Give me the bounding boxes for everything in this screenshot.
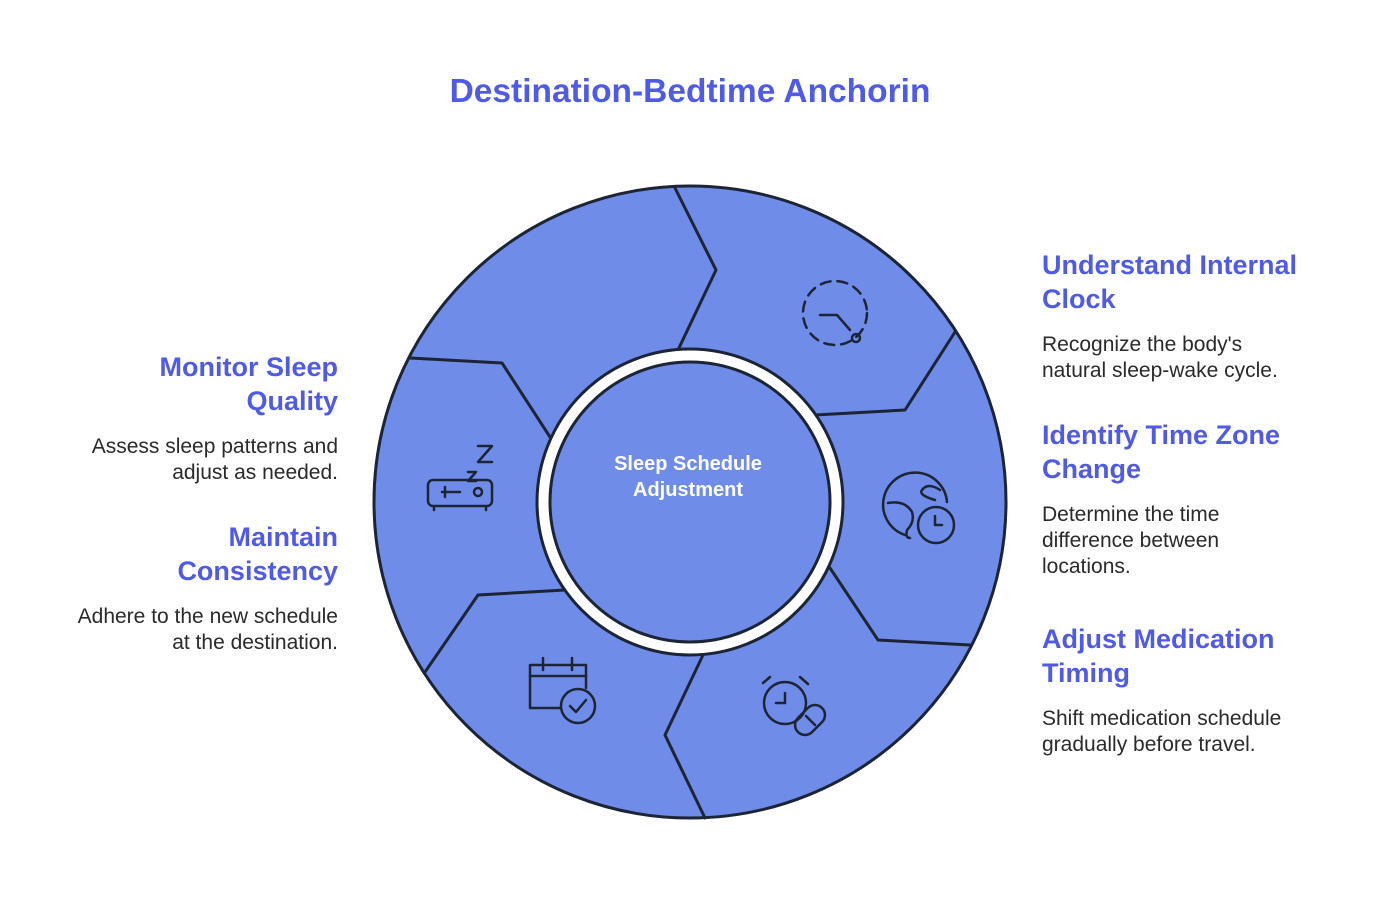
text: adjust medication timing: gradually before travel. [1042, 733, 1256, 756]
text: understand internal clock: Understand Internal [1042, 250, 1297, 280]
text: maintain consistency: at the destination. [172, 631, 338, 654]
icon: dashed clock [803, 281, 867, 345]
text: identify time zone change [1042, 420, 1280, 578]
center label: Sleep Schedule [614, 453, 762, 475]
text: adjust medication timing: Adjust Medication [1042, 624, 1275, 654]
icon: globe clock [883, 473, 954, 543]
text: understand internal clock: Clock [1042, 284, 1116, 314]
text: adjust medication timing: Shift medication schedule [1042, 707, 1281, 730]
text: maintain consistency: Consistency [177, 556, 338, 586]
text: adjust medication timing [1042, 624, 1281, 756]
icon: alarm pill [763, 677, 829, 739]
text: identify time zone change: locations. [1042, 555, 1131, 578]
text: identify time zone change: Identify Time Zone [1042, 420, 1280, 450]
icon: sleep device [428, 446, 492, 510]
text: understand internal clock [1042, 250, 1297, 382]
text: monitor sleep quality: Quality [246, 386, 338, 416]
outer ring [374, 186, 1006, 818]
segment dividers [410, 188, 970, 818]
text: monitor sleep quality: Assess sleep patterns and [92, 435, 338, 458]
title: Destination-Bedtime Anchorin [450, 73, 930, 110]
text: adjust medication timing: Timing [1042, 658, 1130, 688]
cycle diagram: Adjustment [633, 479, 743, 501]
text: understand internal clock: natural sleep-wake cycle. [1042, 359, 1278, 382]
text: monitor sleep quality: Monitor Sleep [159, 352, 338, 382]
text: understand internal clock: Recognize the body's [1042, 333, 1242, 356]
text: monitor sleep quality: adjust as needed. [172, 461, 338, 484]
text: identify time zone change: difference between [1042, 529, 1219, 552]
text: maintain consistency: Adhere to the new schedule [78, 605, 338, 628]
icon: calendar check [530, 658, 595, 723]
text: maintain consistency [78, 522, 338, 654]
text: maintain consistency: Maintain [228, 522, 338, 552]
text: identify time zone change: Change [1042, 454, 1141, 484]
text: identify time zone change: Determine the time [1042, 503, 1219, 526]
inner white ring [537, 349, 843, 655]
text: monitor sleep quality [92, 352, 338, 484]
